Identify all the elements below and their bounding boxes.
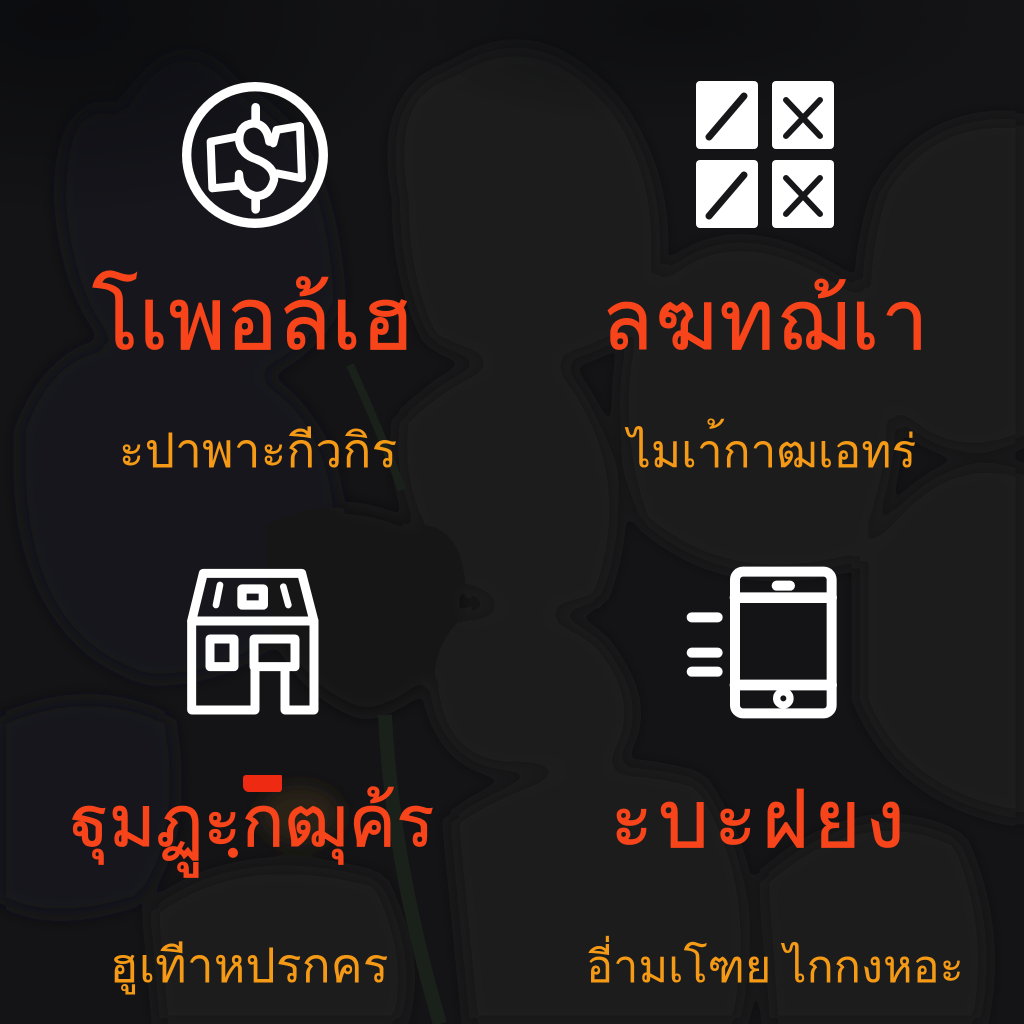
heading: top right: ลฆทฌ้เา — [602, 273, 930, 367]
subheading: bottom right: อี่ามเโฑย ไกกงหอะ — [586, 941, 964, 992]
heading: bottom right: ะบะฝยง — [610, 775, 910, 864]
subheading: bottom left: ฮูเทีาหปรกคร — [109, 940, 389, 993]
subheading: top left: ะปาพาะกีวกิร — [119, 425, 397, 478]
red mark above heading — [243, 775, 282, 792]
heading: top left: โเพอล้เฮ — [92, 271, 414, 368]
subheading: top right: ไมเา้กาฒเอทร่ — [628, 425, 916, 477]
heading: bottom left: ฐุมฏูะฺกฒุค้ร — [70, 783, 434, 862]
